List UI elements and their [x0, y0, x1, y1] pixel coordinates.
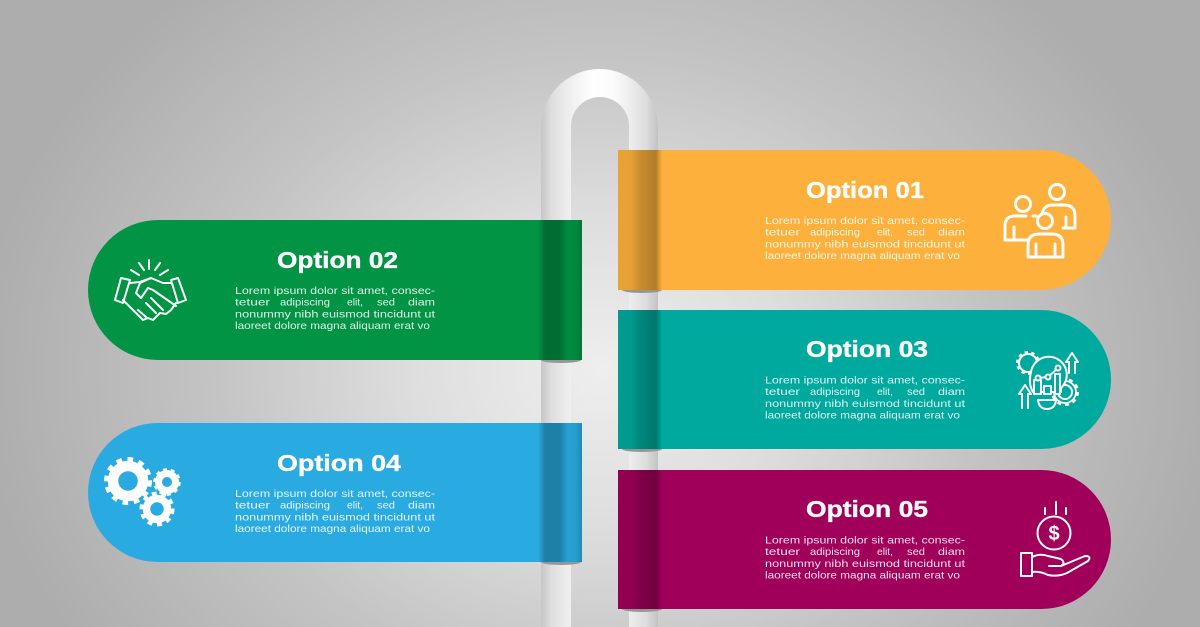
panel: option 04: [88, 423, 582, 565]
body text: elit,: [877, 547, 893, 558]
body text: elit,: [347, 298, 363, 309]
body text: sed: [377, 298, 395, 309]
icon: growth analytics: [1018, 352, 1078, 409]
body text: diam: [408, 501, 435, 512]
body text: diam: [938, 547, 965, 558]
fold shading: [618, 310, 662, 449]
body text: tetuer: [235, 501, 271, 512]
fold shading: [618, 470, 662, 609]
band shadow: [541, 559, 581, 565]
body text: laoreet dolore magna aliquam erat vo: [235, 524, 430, 535]
body text: nonummy nibh euismod tincidunt ut: [765, 559, 965, 570]
body text: sed: [907, 547, 925, 558]
body text: [235, 489, 435, 535]
body text: Lorem ipsum dolor sit amet, consec-: [765, 216, 965, 227]
heading: Option 04: [277, 450, 401, 476]
body text: laoreet dolore magna aliquam erat vo: [765, 251, 960, 262]
body text: nonummy nibh euismod tincidunt ut: [235, 512, 435, 523]
body text: laoreet dolore magna aliquam erat vo: [765, 570, 960, 582]
panel: option 01: [618, 150, 1111, 293]
body text: Lorem ipsum dolor sit amet, consec-: [235, 286, 435, 297]
body text: adipiscing: [280, 298, 330, 309]
body text: elit,: [877, 228, 893, 239]
body text: Lorem ipsum dolor sit amet, consec-: [765, 536, 965, 546]
body text: elit,: [877, 387, 893, 398]
heading: Option 05: [806, 496, 928, 522]
band shadow: [622, 446, 662, 452]
body text: adipiscing: [810, 387, 860, 398]
body text: [765, 216, 965, 262]
heading: Option 03: [806, 336, 928, 362]
panel: option 02: [88, 220, 582, 363]
body text: elit,: [347, 501, 363, 512]
icon: money in hand: $: [1048, 523, 1060, 545]
body text: [235, 286, 435, 332]
body text: adipiscing: [810, 228, 860, 239]
icon: people: [1005, 184, 1075, 257]
fold shading: [538, 423, 582, 562]
band shadow: [622, 287, 662, 293]
ribbon: [618, 310, 1111, 449]
body text: laoreet dolore magna aliquam erat vo: [235, 321, 430, 332]
body text: tetuer: [235, 298, 271, 309]
band shadow: [541, 357, 581, 363]
ribbon: [618, 470, 1111, 609]
icon: money in hand: [1021, 502, 1089, 576]
body text: Lorem ipsum dolor sit amet, consec-: [235, 489, 435, 500]
body text: sed: [377, 501, 395, 512]
ribbon: [88, 220, 582, 360]
body text: diam: [938, 387, 965, 398]
fold shading: [538, 220, 582, 360]
body text: tetuer: [765, 228, 801, 239]
body text: laoreet dolore magna aliquam erat vo: [765, 410, 960, 422]
body text: Lorem ipsum dolor sit amet, consec-: [765, 376, 965, 386]
icon: gears: [106, 460, 179, 524]
panel: option 05: [618, 470, 1111, 612]
body text: tetuer: [765, 547, 801, 558]
ribbon: [88, 423, 582, 562]
body text: adipiscing: [810, 547, 860, 558]
central pipe: [541, 69, 658, 627]
body text: [765, 376, 965, 422]
body text: adipiscing: [280, 501, 330, 512]
panel: option 03: [618, 310, 1111, 452]
body text: [765, 536, 965, 582]
body text: nonummy nibh euismod tincidunt ut: [235, 309, 435, 320]
body text: diam: [938, 228, 965, 239]
fold shading: [618, 150, 662, 290]
body text: tetuer: [765, 387, 801, 398]
body text: sed: [907, 228, 925, 239]
heading: Option 01: [806, 177, 924, 203]
body text: diam: [408, 298, 435, 309]
body text: nonummy nibh euismod tincidunt ut: [765, 239, 965, 250]
ribbon: [618, 150, 1111, 290]
body text: sed: [907, 387, 925, 398]
band shadow: [622, 606, 662, 612]
icon: handshake: [115, 260, 186, 320]
heading: Option 02: [277, 247, 398, 273]
body text: nonummy nibh euismod tincidunt ut: [765, 399, 965, 410]
